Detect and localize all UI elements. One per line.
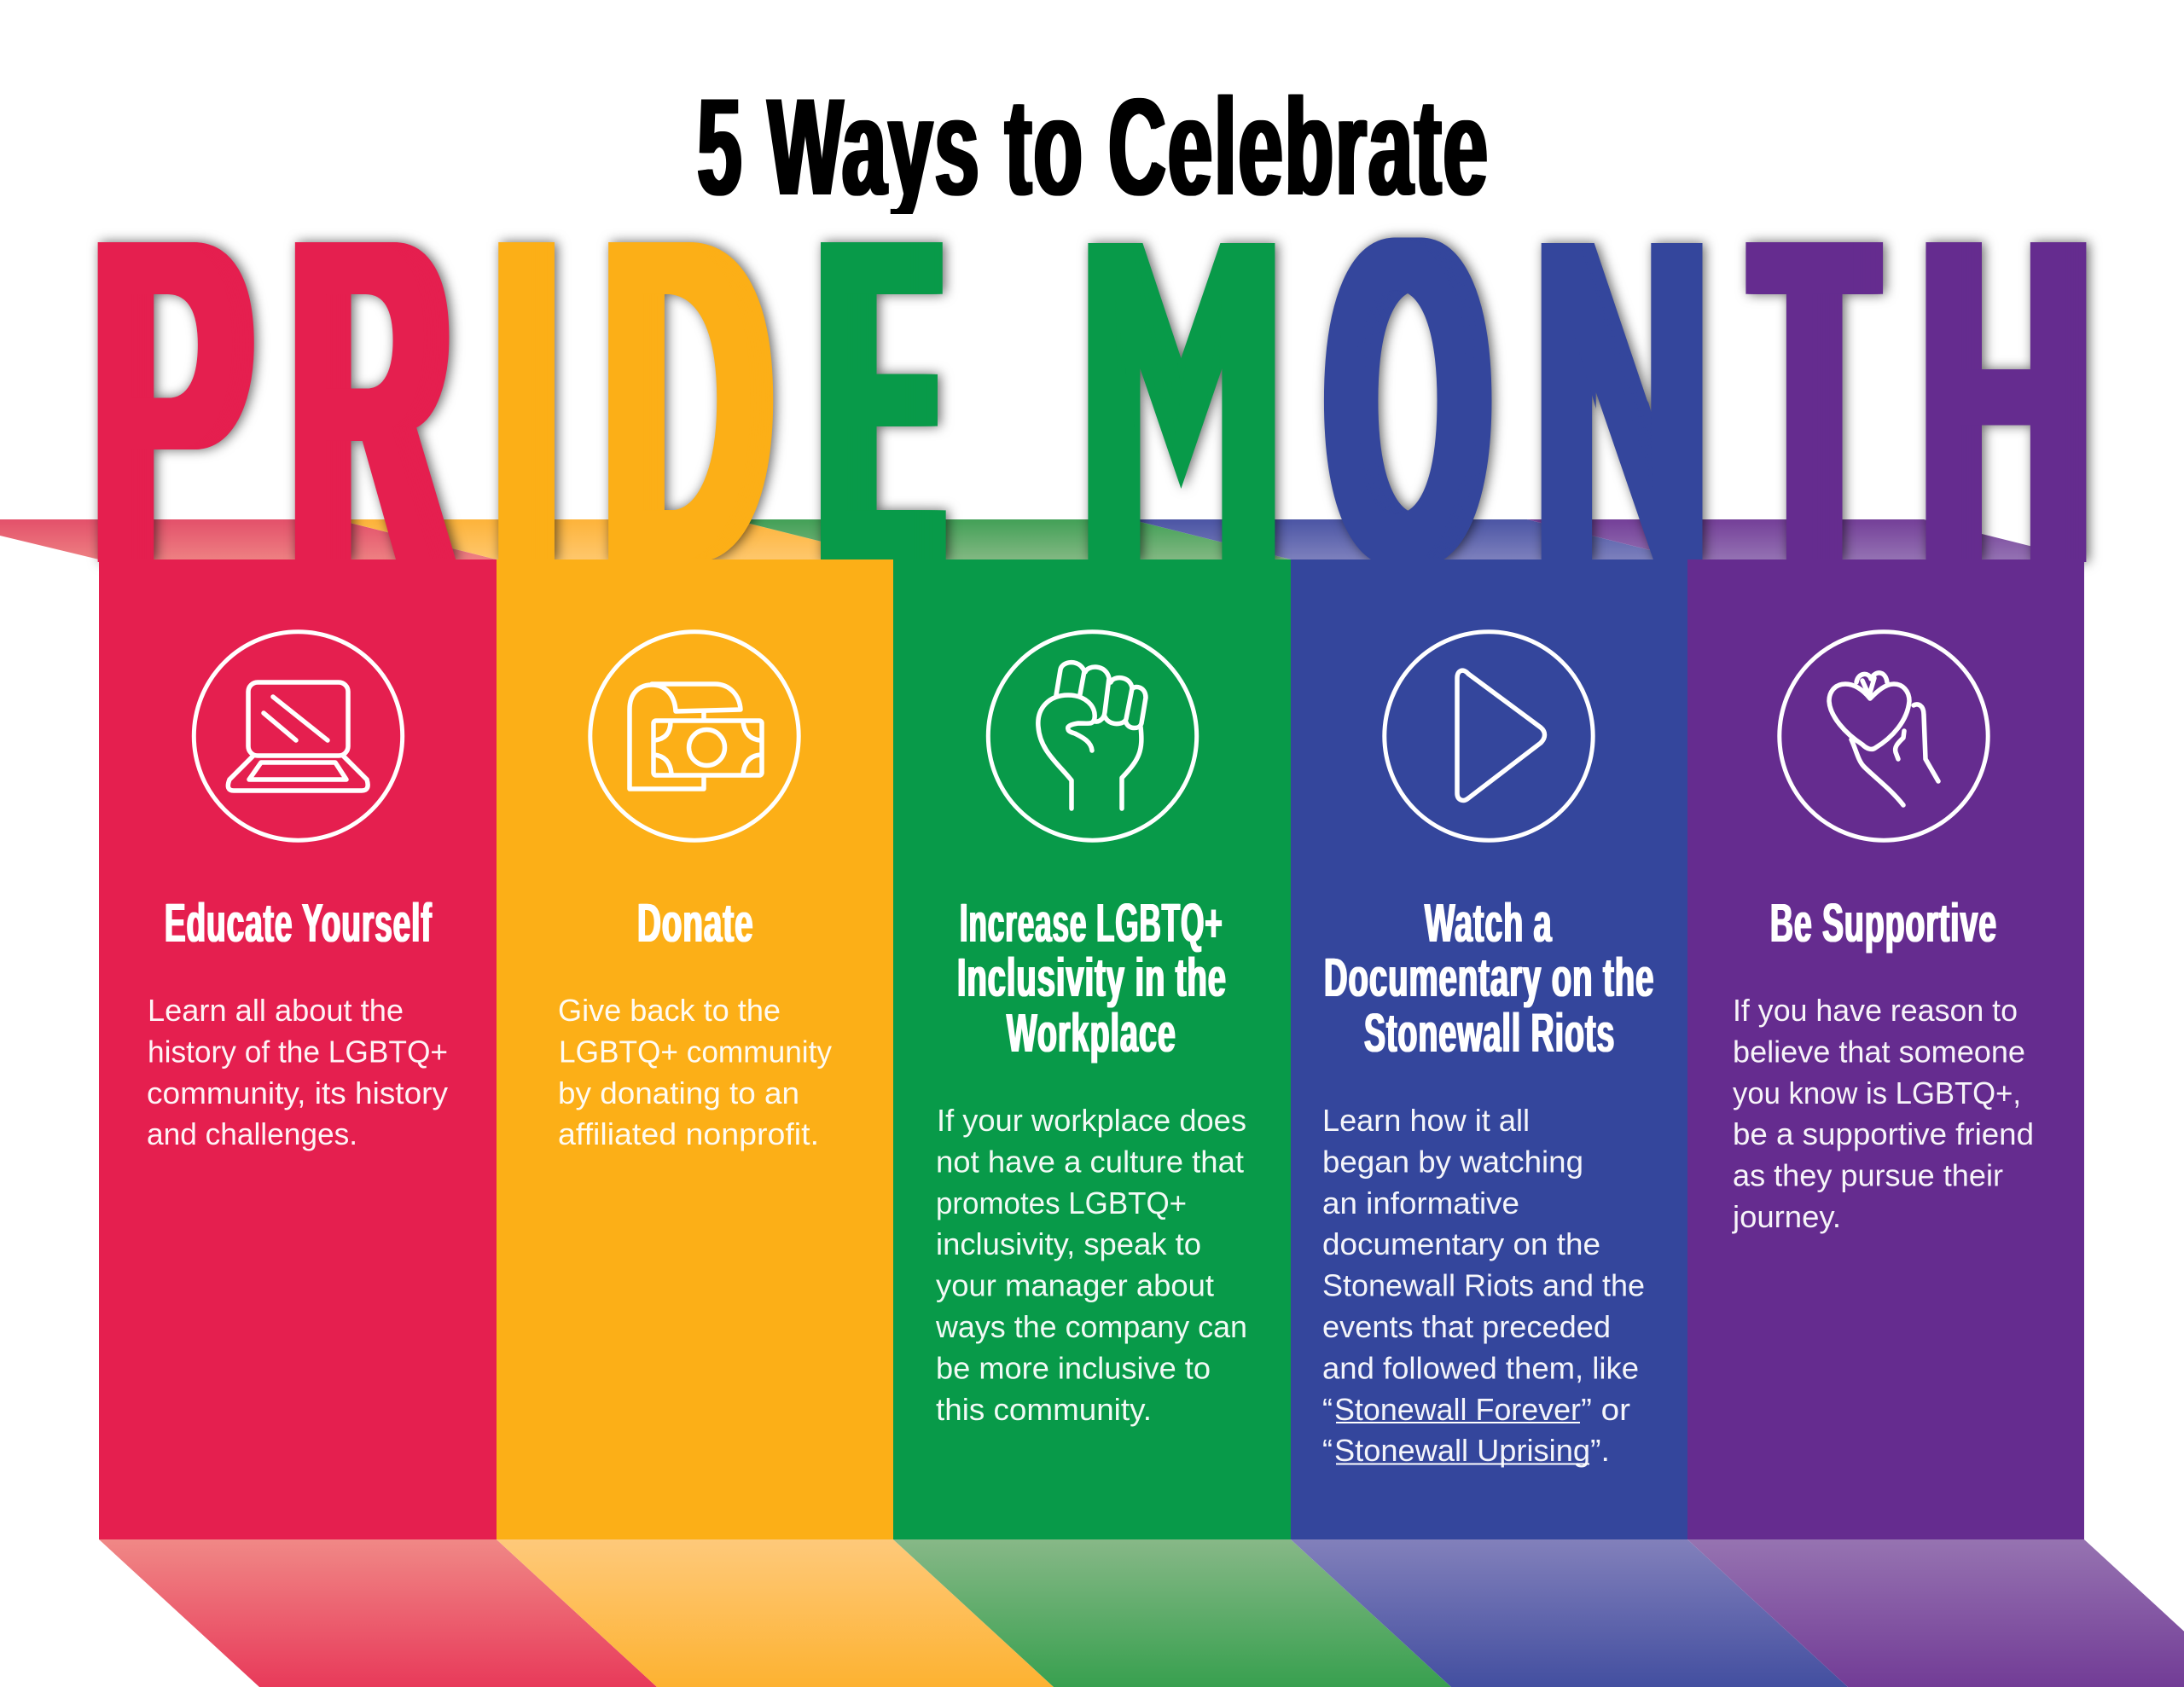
body text: Be Supportive: be a supportive friend (1733, 1116, 2034, 1151)
title: PRIDE MONTH: M (1072, 142, 1265, 661)
body text: Increase LGBTQ+: If your workplace does (937, 1103, 1246, 1138)
body text: Watch a Documentary: “ (1322, 1392, 1333, 1427)
body text: Watch a Documentary: events that preceded (1322, 1309, 1611, 1344)
body text: Be Supportive: If you have reason to (1733, 993, 2018, 1028)
body text: Be Supportive: you know is LGBTQ+, (1733, 1075, 2021, 1110)
icon: raised fist in circle (986, 629, 1199, 843)
icon: laptop in circle (191, 629, 404, 843)
heading: Be Supportive: Be Supportive (1769, 892, 1996, 954)
title: PRIDE MONTH: D (593, 142, 760, 661)
title: PRIDE MONTH (82, 142, 2098, 661)
heading: Increase LGBTQ+ Inclusivity in the Workplace: Increase LGBTQ+ (959, 892, 1223, 954)
body text: Be Supportive: journey. (1732, 1199, 1841, 1234)
icon: money scroll in circle (588, 629, 801, 843)
heading: Watch a Documentary on the Stonewall Riots: Documentary on the (1323, 947, 1653, 1008)
body text: Be Supportive: believe that someone (1733, 1034, 2025, 1069)
body text: Increase LGBTQ+: inclusivity, speak to (936, 1226, 1201, 1261)
heading: Watch a Documentary on the Stonewall Riots (1323, 892, 1653, 1064)
body text: Donate (558, 993, 832, 1151)
body text: Educate Yourself: history of the LGBTQ+ (148, 1034, 448, 1069)
heading: Watch a Documentary on the Stonewall Riots: Watch a (1424, 892, 1552, 954)
icon: play button in circle (1382, 629, 1595, 843)
title: PRIDE MONTH: R (281, 142, 435, 661)
panel: Educate Yourself (99, 559, 497, 1539)
body text: Educate Yourself: Learn all about the (148, 993, 404, 1028)
body text: Educate Yourself (147, 993, 448, 1151)
body text: Be Supportive: as they pursue their (1733, 1158, 2003, 1193)
title: PRIDE MONTH: E (810, 142, 921, 661)
heading: Donate: Donate (636, 892, 753, 954)
body text: Donate: affiliated nonprofit. (558, 1116, 819, 1151)
panel: Be Supportive (1687, 559, 2084, 1539)
body text: Donate: by donating to an (558, 1075, 799, 1110)
panel: Increase LGBTQ+ Inclusivity in the Workplace (893, 559, 1291, 1539)
heading: Increase LGBTQ+ Inclusivity in the Workplace (956, 892, 1226, 1064)
body text: Watch a Documentary: Learn how it all (1322, 1103, 1530, 1138)
title: PRIDE MONTH: T (1744, 142, 1856, 661)
body text: Watch a Documentary (1322, 1103, 1645, 1468)
body text: Watch a Documentary: an informative (1322, 1186, 1519, 1220)
title: 5 Ways to Celebrate: 5 Ways to Celebrate (695, 70, 1488, 224)
body text: Increase LGBTQ+ (935, 1103, 1247, 1427)
body text: Increase LGBTQ+: not have a culture that (936, 1144, 1244, 1179)
body text: Watch a Documentary: documentary on the (1322, 1226, 1600, 1261)
body text: Increase LGBTQ+: be more inclusive to (936, 1350, 1211, 1385)
body text: Increase LGBTQ+: this community. (936, 1392, 1152, 1427)
body text: Increase LGBTQ+: promotes LGBTQ+ (936, 1186, 1187, 1220)
heading: Watch a Documentary on the Stonewall Riots: Stonewall Riots (1363, 1002, 1614, 1064)
title: PRIDE MONTH: I (483, 142, 548, 661)
body text: Educate Yourself: community, its history (147, 1075, 448, 1110)
body text: Be Supportive (1732, 993, 2034, 1234)
body text: Watch a Documentary: ”. (1590, 1433, 1610, 1468)
body text: Watch a Documentary: ” or (1581, 1392, 1630, 1427)
body text: Watch a Documentary: began by watching (1322, 1144, 1583, 1179)
body text: Watch a Documentary: Stonewall Riots and the (1322, 1268, 1645, 1303)
body text: Donate: LGBTQ+ community (559, 1034, 832, 1069)
icon: hand holding heart in circle (1777, 629, 1990, 843)
title: PRIDE MONTH: P (82, 142, 240, 661)
title: PRIDE MONTH: N (1524, 142, 1699, 661)
panel: Watch a Documentary on the Stonewall Riots (1291, 559, 1687, 1539)
body text: Watch a Documentary: Stonewall Forever (1334, 1392, 1581, 1427)
body text: Increase LGBTQ+: your manager about (936, 1268, 1214, 1303)
heading: Educate Yourself: Educate Yourself (164, 892, 432, 954)
body text: Increase LGBTQ+: ways the company can (935, 1309, 1247, 1344)
panel: Donate (497, 559, 893, 1539)
body text: Educate Yourself: and challenges. (147, 1116, 357, 1151)
title: PRIDE MONTH: H (1910, 142, 2080, 661)
body text: Watch a Documentary: “ (1322, 1433, 1333, 1468)
heading: Increase LGBTQ+ Inclusivity in the Workplace: Workplace (1006, 1002, 1176, 1064)
title: PRIDE MONTH: O (1316, 142, 1476, 661)
body text: Donate: Give back to the (558, 993, 781, 1028)
heading: Increase LGBTQ+ Inclusivity in the Workplace: Inclusivity in the (956, 947, 1226, 1008)
body text: Watch a Documentary: Stonewall Uprising (1334, 1433, 1590, 1468)
body text: Watch a Documentary: and followed them, like (1322, 1350, 1639, 1385)
